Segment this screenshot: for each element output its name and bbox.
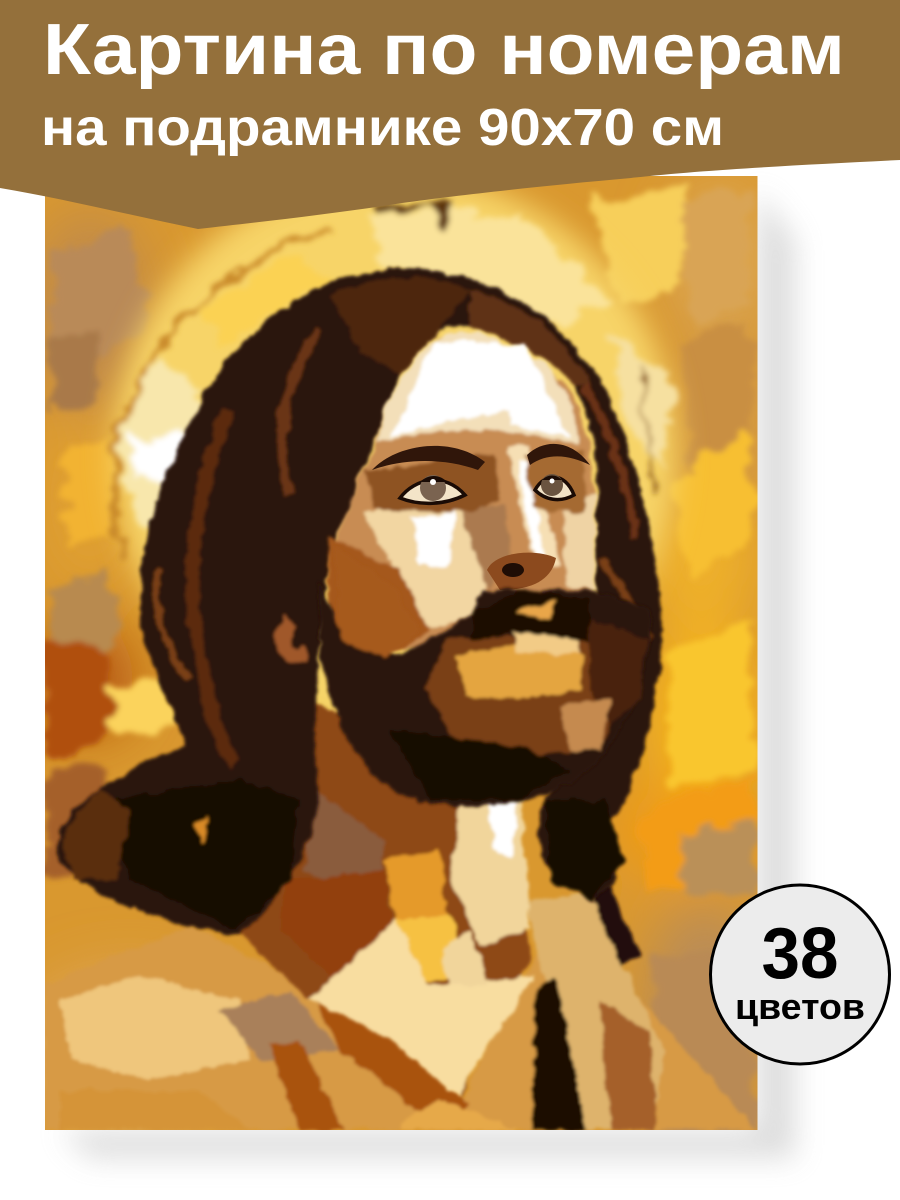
robe <box>45 885 757 1130</box>
neck and chest <box>230 700 535 1095</box>
right eye <box>535 477 574 500</box>
badge: 38 colours <box>710 885 890 1064</box>
badge: 38 colours: цветов <box>735 986 865 1027</box>
badge: 38 colours: 38 <box>762 914 838 994</box>
halo <box>113 173 677 737</box>
face <box>327 332 596 650</box>
hair <box>55 268 662 935</box>
beard <box>316 586 652 810</box>
painting: portrait on canvas <box>20 173 775 1130</box>
subtitle: на подрамнике 90х70 см <box>41 99 724 157</box>
title banner <box>0 0 900 229</box>
canvas drop shadow <box>60 190 795 1158</box>
title: Картина по номерам <box>43 10 845 90</box>
nose <box>487 553 556 590</box>
left brow <box>372 446 485 470</box>
painting background colour patches <box>20 180 775 1130</box>
right brow <box>527 444 590 465</box>
left eye <box>400 480 465 503</box>
painting background brush marks <box>45 190 757 1130</box>
